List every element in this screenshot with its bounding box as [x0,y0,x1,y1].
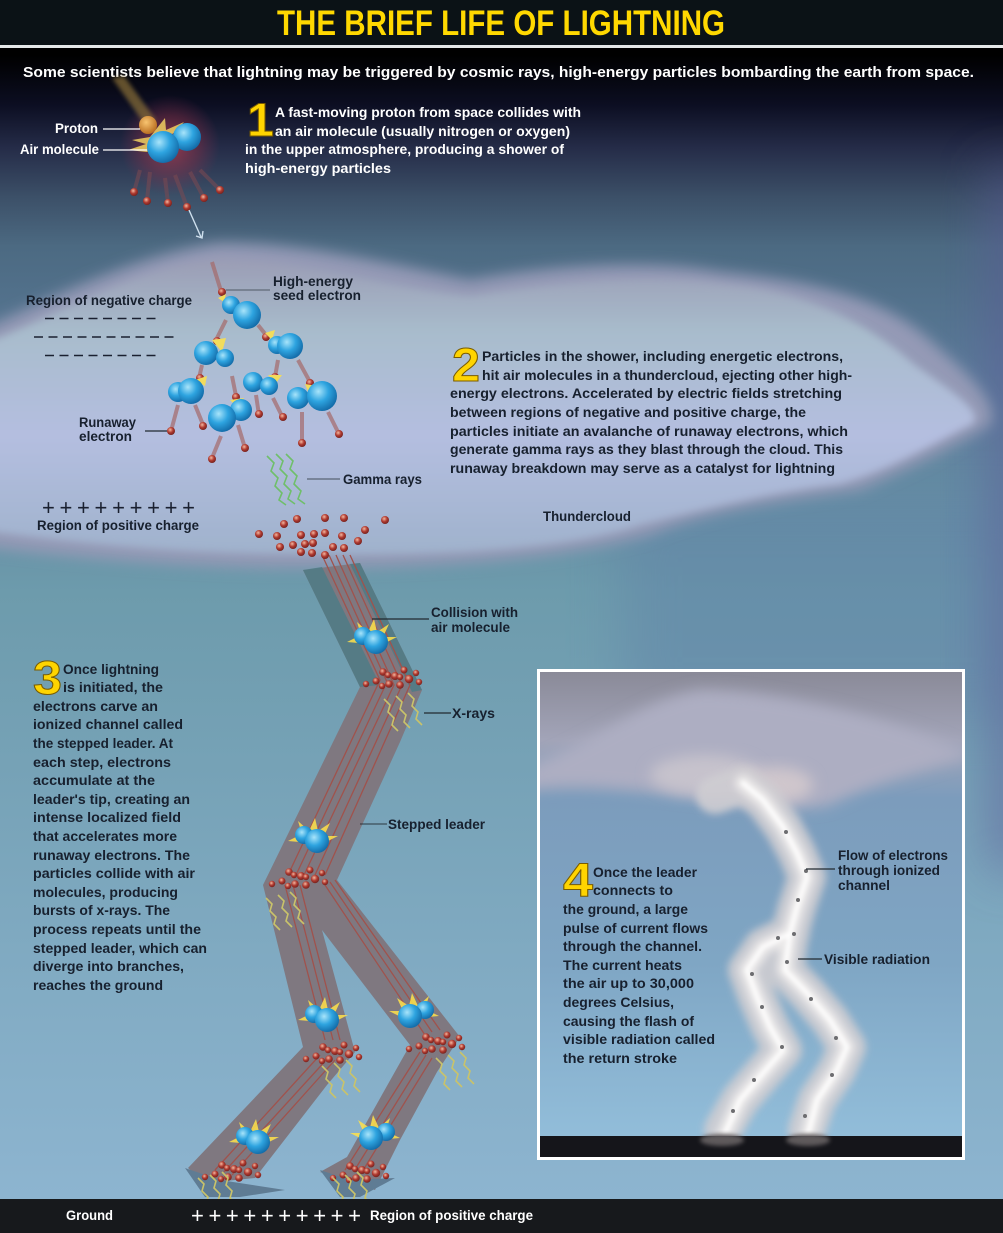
leader collisions and x-rays [198,619,474,1210]
collision label [372,605,518,635]
step 3 text: runaway electrons. The [33,848,191,863]
step 2 text: between regions of negative and positive charge, the [450,405,807,420]
ground bar: ++++++++++ [191,1203,361,1228]
x-rays label: X-rays [452,706,495,721]
high-energy seed electron label: High-energy [273,274,353,289]
step 1 text: an air molecule (usually nitrogen or oxygen) [275,124,570,139]
step 3 text: Once lightning [63,662,159,677]
gamma rays [267,454,422,505]
thundercloud label: Thundercloud [543,509,631,524]
title bar [0,0,1003,48]
step 2 text: runaway breakdown may serve as a catalyst for lightning [450,461,835,476]
step 2 text: particles initiate an avalanche of runaway electrons, which [450,424,848,439]
intro text: Some scientists believe that lightning may be triggered by cosmic rays, high-energy particles bombarding the earth from space. [23,64,974,81]
step 2 text: Particles in the shower, including energetic electrons, [482,349,843,364]
ground bar [0,1199,1003,1233]
step 2 text: hit air molecules in a thundercloud, ejecting other high- [482,368,852,383]
air molecule label [20,142,147,157]
molecules [168,294,337,432]
step 1: proton collision [112,76,224,238]
step 1 text: high-energy particles [245,161,391,176]
step 3 text: electrons carve an [33,699,158,714]
step 2: electron avalanche [167,262,343,463]
region of positive charge: Region of positive charge [37,518,199,533]
step 3 text: diverge into branches, [33,959,184,974]
flow of electrons label [806,848,948,893]
step 1 text: 1 [247,93,274,146]
ground bar: Ground [66,1208,113,1223]
step 4 text: causing the flash of [563,1014,695,1029]
step 4 text: 4 [563,853,593,906]
step 3 text: is initiated, the [63,680,164,695]
particle shower [130,170,224,211]
step 3 text: that accelerates more [33,829,178,844]
flow of electrons label: Flow of electrons [838,848,948,863]
step 3 text: ionized channel called [33,717,183,732]
runaway electron label: electron [79,429,132,444]
air molecule label: Air molecule [20,142,99,157]
step 1 text [245,93,581,176]
step 4 text: pulse of current flows [563,921,708,936]
step 1 text: in the upper atmosphere, producing a shower of [245,142,565,157]
collision label: Collision with [431,605,518,620]
region of positive charge [37,495,199,533]
step 3 text: molecules, producing [33,885,178,900]
gamma rays: Gamma rays [343,472,422,487]
step 4 text: The current heats [563,958,682,973]
panel: return stroke [520,670,975,1158]
step 3 text: particles collide with air [33,866,196,881]
stepped leader label: Stepped leader [388,817,486,832]
step 3 text: stepped leader, which can [33,941,207,956]
ground bar: Region of positive charge [370,1208,533,1223]
region of negative charge [26,293,192,356]
flow of electrons label: channel [838,878,890,893]
icon: air molecule [147,123,201,163]
thundercloud [0,243,992,568]
step 2 text: generate gamma rays as they blast through the cloud. This [450,442,843,457]
step 4 text: connects to [593,883,673,898]
step 3 text: leader's tip, creating an [33,792,190,807]
step 3 text: each step, electrons [33,755,171,770]
step 3 text: reaches the ground [33,978,163,993]
step 3 text: 3 [33,651,62,704]
step 3 text [33,651,207,993]
step 2 text: 2 [452,338,480,391]
step 4 text: the ground, a large [563,902,689,917]
step 3 text: bursts of x-rays. The [33,903,170,918]
collision label: air molecule [431,620,510,635]
inset cloud and lightning [520,690,975,1157]
step 3 text: process repeats until the [33,922,202,937]
step 4 text: the return stroke [563,1051,678,1066]
step 4 text: visible radiation called [563,1032,715,1047]
proton label: Proton [55,121,98,136]
step 2 text: energy electrons. Accelerated by electric fields stretching [450,386,842,401]
step 3 text: accumulate at the [33,773,156,788]
runaway electron label: Runaway [79,415,136,430]
electron cluster under cloud [255,514,389,559]
step 3 text: intense localized field [33,810,181,825]
title bar: THE BRIEF LIFE OF LIGHTNING [277,4,725,43]
region of negative charge: Region of negative charge [26,293,192,308]
runaway electron label [79,415,167,444]
step 4 text: the air up to 30,000 [563,976,694,991]
step 4 text: Once the leader [593,865,698,880]
high-energy seed electron label: seed electron [273,288,361,303]
icon: proton [139,116,157,134]
step 3 text: the stepped leader. At [33,736,173,751]
electrons in channel [731,830,838,1118]
x-rays label [424,706,495,721]
ground [540,1136,962,1157]
high-energy seed electron label [226,274,361,303]
step 4 text: through the channel. [563,939,702,954]
step 1 text: A fast-moving proton from space collides with [275,105,581,120]
stepped leader channel [185,555,460,1197]
arrow [189,210,203,238]
visible radiation label: Visible radiation [824,952,930,967]
proton label [55,121,140,136]
step 4 text [563,853,715,1066]
flow of electrons label: through ionized [838,863,940,878]
region of positive charge: +++++++++ [42,495,195,520]
step 2 text [450,338,852,476]
step 4 text: degrees Celsius, [563,995,674,1010]
